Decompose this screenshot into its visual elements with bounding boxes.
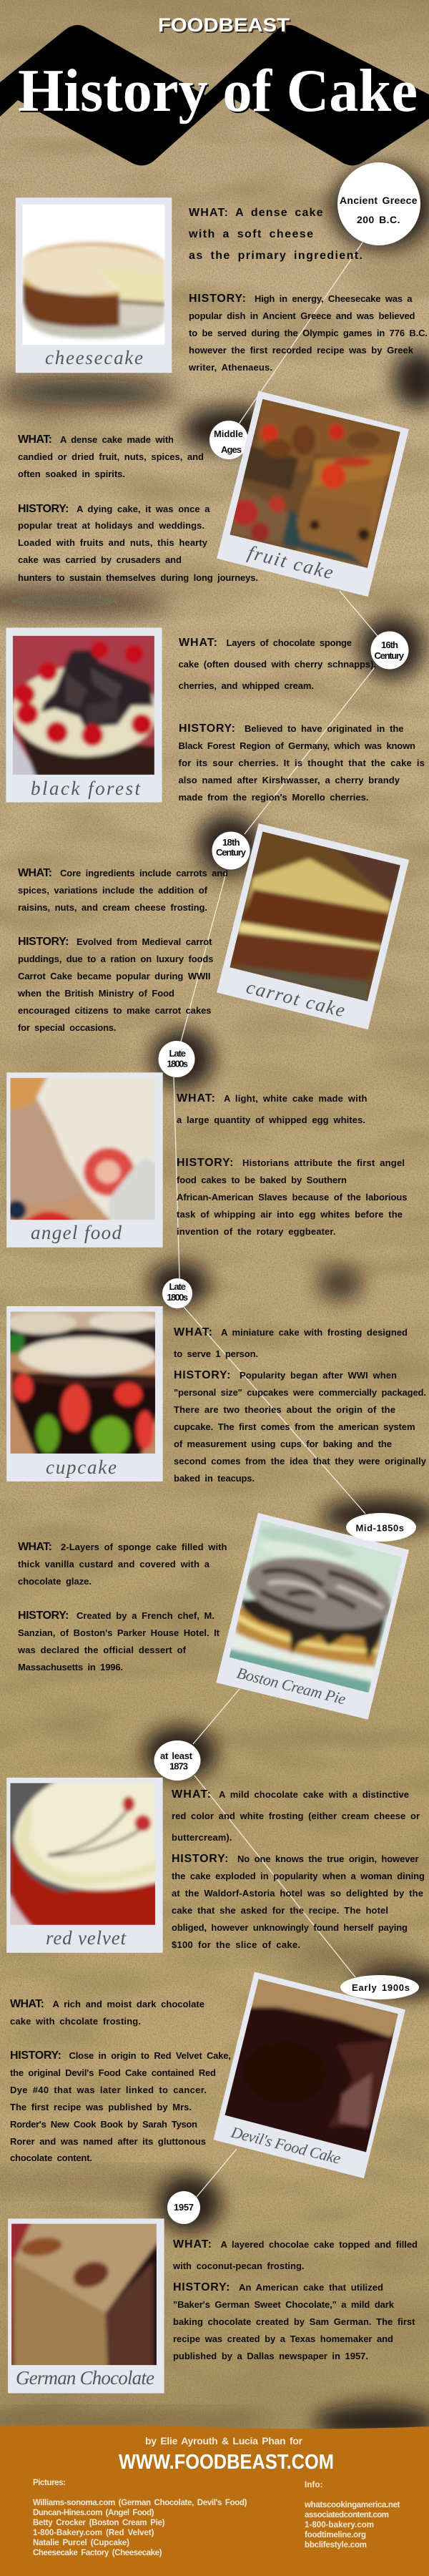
section text: black forest: made from the region's Morello cherries. xyxy=(179,792,369,803)
section text: devil's food cake: HISTORY: xyxy=(10,2049,61,2062)
section text: red velvet: buttercream). xyxy=(172,1832,232,1843)
date marker: 16th century: 16th xyxy=(381,640,398,650)
section text: cheesecake: however the first recorded recipe was by Greek xyxy=(189,345,414,356)
section text: carrot cake: spices, variations include the addition of xyxy=(18,885,208,896)
section text: german chocolate: A layered chocolae cake topped and filled xyxy=(220,2239,418,2250)
caption: red velvet: red velvet xyxy=(46,1927,127,1949)
section text: carrot cake: encouraged citizens to make carrot cakes xyxy=(18,1005,212,1016)
date marker: late 1800s (second): Late xyxy=(169,1281,186,1292)
section text: red velvet: No one knows the true origin, however xyxy=(237,1853,419,1864)
photo: carrot cake xyxy=(213,823,413,1029)
section text: carrot cake: raisins, nuts, and cream cheese frosting. xyxy=(18,902,207,913)
photo: devil's food cake xyxy=(213,1969,410,2178)
date marker: mid-1850s: Mid-1850s xyxy=(356,1523,404,1534)
section text: devil's food cake: the original Devil's Food Cake contained Red xyxy=(10,2067,216,2078)
section text: german chocolate: recipe was created by a Texas homemaker and xyxy=(173,2333,393,2344)
section text: devil's food cake: Close in origin to Red Velvet Cake, xyxy=(69,2050,231,2061)
section text: german chocolate: "Baker's German Sweet Chocolate," a mild dark xyxy=(173,2299,395,2310)
section text: fruit cake: A dying cake, it was once a xyxy=(77,504,210,514)
section text: red velvet: $100 for the slice of cake. xyxy=(172,1939,300,1950)
section text: boston cream pie: chocolate glaze. xyxy=(18,1576,92,1587)
caption: cupcake: cupcake xyxy=(46,1456,117,1478)
section text: fruit cake: WHAT: xyxy=(18,434,52,446)
section text: angel food: task of whipping air into egg whites before the xyxy=(177,1209,403,1220)
section text: red velvet: at the Waldorf-Astoria hotel was so delighted by the xyxy=(172,1888,423,1899)
section text: german chocolate: WHAT: xyxy=(173,2238,212,2251)
photo: cupcake xyxy=(5,1306,163,1482)
section text: fruit cake: HISTORY: xyxy=(18,503,69,515)
photo: cheesecake xyxy=(16,197,172,373)
title: History of Cake xyxy=(18,57,418,124)
section text: carrot cake: Evolved from Medieval carrot xyxy=(77,936,212,947)
footer picture credits: Williams-sonoma.com (German Chocolate, Devil's Food) xyxy=(33,2499,247,2507)
date marker: late 1800s (second) xyxy=(162,1278,192,1308)
photo: fruit cake xyxy=(213,391,413,597)
section text: cupcake xyxy=(174,1326,427,1484)
date marker: late 1800s xyxy=(159,1041,194,1077)
caption: german chocolate: German Chocolate xyxy=(16,2367,154,2389)
section text: black forest: Layers of chocolate sponge xyxy=(226,637,352,648)
section text: red velvet: red color and white frosting (either cream cheese or xyxy=(172,1811,420,1821)
section text: black forest: for its sour cherries. It is thought that the cake is xyxy=(179,758,425,768)
section text: cheesecake: WHAT: A dense cake xyxy=(189,207,323,219)
date marker: ancient greece xyxy=(337,162,420,245)
footer info credits: bbclifestyle.com xyxy=(305,2541,367,2550)
section text: devil's food cake: Dye #40 that was later linked to cancer. xyxy=(10,2085,207,2095)
section text: fruit cake: Loaded with fruits and nuts, this hearty xyxy=(18,537,208,548)
section text: boston cream pie: 2-Layers of sponge cake filled with xyxy=(61,1542,227,1552)
section text: carrot cake: WHAT: xyxy=(18,867,52,879)
footer picture credits: Natalie Purcel (Cupcake) xyxy=(33,2539,129,2547)
caption: carrot cake: carrot cake xyxy=(245,976,347,1021)
section text: fruit cake: candied or dried fruit, nuts, spices, and xyxy=(18,451,204,462)
section text: black forest: also named after Kirshwasser, a cherry brandy xyxy=(179,775,400,785)
title: History of Cake xyxy=(19,59,419,126)
section text: boston cream pie xyxy=(17,1541,227,1673)
section text: boston cream pie: Sanzian, of Boston's Parker House Hotel. It xyxy=(18,1627,220,1638)
footer info credits: 1-800-bakery.com xyxy=(305,2521,374,2530)
section text: boston cream pie: was declared the official dessert of xyxy=(17,1645,187,1655)
caption: cheesecake: cheesecake xyxy=(45,347,143,368)
section text: angel food: a large quantity of whipped egg whites. xyxy=(177,1115,365,1125)
section text: german chocolate: published by a Dallas newspaper in 1957. xyxy=(173,2351,368,2361)
footer picture credits: Cheesecake Factory (Cheesecake) xyxy=(33,2549,162,2557)
section text: fruit cake xyxy=(18,434,258,583)
caption: angel food: angel food xyxy=(31,1222,122,1243)
section text: cheesecake xyxy=(188,207,428,373)
section text: red velvet: obliged, however unknowingly found herself paying xyxy=(172,1922,408,1933)
photo: german chocolate xyxy=(6,2218,164,2394)
footer info credits: foodtimeline.org xyxy=(305,2531,366,2540)
date marker: 16th century: Century xyxy=(375,650,405,661)
footer credit: by Elie Ayrouth & Lucia Phan for xyxy=(145,2435,303,2447)
caption: black forest: black forest xyxy=(31,778,141,799)
caption: fruit cake: fruit cake xyxy=(246,542,335,583)
section text: angel food: African-American Slaves because of the laborious xyxy=(177,1192,408,1203)
date marker: ancient greece: Ancient Greece xyxy=(340,195,418,206)
section text: angel food: food cakes to be baked by Southern xyxy=(177,1175,347,1185)
section text: black forest: cake (often doused with cherry schnapps), xyxy=(179,659,376,670)
logo: Foodbeast: FOODBEAST xyxy=(158,14,290,36)
photo: boston cream pie xyxy=(216,1512,413,1720)
section text: angel food: A light, white cake made with xyxy=(224,1093,368,1104)
timeline connector line xyxy=(174,243,378,2197)
section text: cupcake: There are two theories about the origin of the xyxy=(174,1404,395,1415)
date marker: at least 1873: at least xyxy=(160,1750,193,1761)
section text: cheesecake: to be served during the Olympic games in 776 B.C. xyxy=(189,328,428,338)
photo: angel food xyxy=(5,1072,163,1248)
section text: fruit cake: often soaked in spirits. xyxy=(18,469,125,479)
date marker: early 1900s: Early 1900s xyxy=(352,1982,410,1993)
section text: cupcake: of measurement using cups for baking and the xyxy=(174,1439,392,1449)
date marker: ancient greece: 200 B.C. xyxy=(357,214,400,225)
section text: fruit cake: hunters to sustain themselves during long journeys. xyxy=(18,572,258,583)
footer info credits xyxy=(304,2481,400,2550)
section text: cupcake: baked in teacups. xyxy=(174,1473,255,1484)
section text: boston cream pie: WHAT: xyxy=(18,1541,52,1553)
footer picture credits: Betty Crocker (Boston Cream Pie) xyxy=(33,2519,165,2527)
date marker: middle ages: Ages xyxy=(221,444,242,455)
section text: devil's food cake: Rorder's New Cook Book by Sarah Tyson xyxy=(10,2119,197,2130)
section text: fruit cake: popular treat at holidays and weddings. xyxy=(18,520,204,531)
section text: cheesecake: High in energy, Cheesecake was a xyxy=(255,293,413,304)
section text: angel food: Historians attribute the first angel xyxy=(242,1157,405,1168)
section text: cheesecake: writer, Athenaeus. xyxy=(188,362,272,373)
section text: german chocolate: HISTORY: xyxy=(173,2281,230,2293)
section text: german chocolate xyxy=(172,2238,418,2361)
section text: cupcake: to serve 1 person. xyxy=(174,1348,258,1359)
photo: red velvet xyxy=(5,1778,163,1953)
footer picture credits: Duncan-Hines.com (Angel Food) xyxy=(33,2509,154,2517)
date marker: middle ages: Middle xyxy=(214,428,243,439)
section text: cupcake: HISTORY: xyxy=(174,1369,230,1381)
section text: devil's food cake: cake with chcolate frosting. xyxy=(10,2016,141,2027)
date marker: 1957: 1957 xyxy=(174,2202,194,2213)
section text: german chocolate: baking chocolate created by Sam German. The first xyxy=(173,2316,415,2327)
footer info credits: Info: xyxy=(305,2481,323,2489)
section text: black forest: WHAT: xyxy=(179,637,217,649)
section text: devil's food cake: A rich and moist dark chocolate xyxy=(53,1999,204,2009)
footer picture credits: Pictures: xyxy=(33,2479,66,2487)
section text: black forest: Black Forest Region of Germany, which was known xyxy=(179,740,415,751)
section text: red velvet: the cake exploded in popularity when a woman dining xyxy=(172,1871,425,1881)
section text: cheesecake: as the primary ingredient. xyxy=(189,250,363,262)
date marker: at least 1873 xyxy=(154,1740,200,1781)
footer band xyxy=(0,2425,429,2576)
caption: boston cream pie: Boston Cream Pie xyxy=(235,1664,347,1708)
section text: devil's food cake: The first recipe was published by Mrs. xyxy=(10,2102,192,2112)
section text: angel food: WHAT: xyxy=(177,1092,215,1105)
footer info credits: whatscookingamerica.net xyxy=(304,2501,400,2509)
section text: cupcake: second comes from the idea that they were originally xyxy=(174,1456,427,1466)
section text: cupcake: WHAT: xyxy=(174,1326,212,1338)
section text: devil's food cake: Rorer and was named after its gluttonous xyxy=(10,2136,206,2147)
section text: boston cream pie: Created by a French chef, M. xyxy=(77,1610,214,1621)
date marker: mid-1850s xyxy=(346,1513,416,1542)
footer website: WWW.FOODBEAST.COM xyxy=(119,2451,334,2474)
section text: angel food: HISTORY: xyxy=(177,1157,233,1169)
date marker: late 1800s: 1800s xyxy=(167,1059,188,1069)
date marker: 1957 xyxy=(167,2191,200,2224)
section text: black forest xyxy=(179,637,425,803)
caption: devil's food cake: Devil's Food Cake xyxy=(229,2122,342,2168)
section text: boston cream pie: Massachusetts in 1996. xyxy=(18,1662,123,1673)
footer picture credits: 1-800-Bakery.com (Red Velvet) xyxy=(33,2529,154,2537)
section text: devil's food cake: WHAT: xyxy=(10,1998,44,2010)
section text: cheesecake: popular dish in Ancient Greece and was believed xyxy=(189,310,415,321)
section text: carrot cake: for special occasions. xyxy=(18,1022,116,1033)
section text: boston cream pie: thick vanilla custard and covered with a xyxy=(18,1559,210,1569)
section text: black forest: HISTORY: xyxy=(179,723,235,735)
date marker: early 1900s xyxy=(340,1975,419,1999)
section text: german chocolate: with coconut-pecan frosting. xyxy=(172,2261,305,2271)
section text: carrot cake: puddings, due to a ration on luxury foods xyxy=(18,954,213,964)
section text: cupcake: "personal size" cupcakes were commercially packaged. xyxy=(174,1387,426,1398)
header zigzag banner xyxy=(0,25,429,165)
section text: cheesecake: with a soft cheese xyxy=(188,228,313,240)
date marker: at least 1873: 1873 xyxy=(169,1761,188,1771)
section text: devil's food cake xyxy=(10,1998,231,2163)
section text: angel food xyxy=(177,1092,408,1237)
section text: boston cream pie: HISTORY: xyxy=(18,1610,69,1622)
section text: black forest: cherries, and whipped cream. xyxy=(179,680,314,691)
date marker: 18th century xyxy=(212,831,250,870)
section text: black forest: Believed to have originated in the xyxy=(245,723,403,734)
date marker: middle ages xyxy=(209,421,248,459)
section text: red velvet: HISTORY: xyxy=(172,1853,229,1865)
section text: red velvet: WHAT: xyxy=(172,1788,211,1801)
section text: cupcake: A miniature cake with frosting designed xyxy=(221,1327,408,1338)
date marker: 18th century: Century xyxy=(216,847,247,858)
section text: devil's food cake: chocolate content. xyxy=(10,2153,92,2163)
section text: german chocolate: An American cake that utilized xyxy=(239,2282,383,2293)
section text: red velvet: cake that she asked for the recipe. The hotel xyxy=(172,1905,388,1916)
logo: Foodbeast: FOODBEAST xyxy=(159,16,292,37)
section text: carrot cake xyxy=(17,867,228,1033)
footer picture credits xyxy=(33,2479,247,2557)
section text: fruit cake: cake was carried by crusaders and xyxy=(18,554,182,565)
section text: red velvet: A mild chocolate cake with a distinctive xyxy=(219,1789,409,1800)
section text: angel food: invention of the rotary eggbeater. xyxy=(177,1226,336,1237)
section text: carrot cake: Carrot Cake became popular during WWII xyxy=(18,971,210,981)
section text: red velvet xyxy=(172,1788,425,1950)
section text: cheesecake: HISTORY: xyxy=(189,293,246,305)
section text: cupcake: cupcake. The first comes from the american system xyxy=(174,1421,415,1432)
date marker: late 1800s (second): 1800s xyxy=(167,1292,188,1303)
date marker: 18th century: 18th xyxy=(222,837,240,848)
footer info credits: associatedcontent.com xyxy=(305,2511,389,2519)
photo: black forest xyxy=(6,627,162,803)
section text: carrot cake: HISTORY: xyxy=(18,936,69,948)
section text: carrot cake: Core ingredients include carrots and xyxy=(60,868,228,878)
section text: fruit cake: A dense cake made with xyxy=(60,434,174,445)
section text: cupcake: Popularity began after WWI when xyxy=(240,1370,397,1381)
date marker: 16th century xyxy=(370,631,409,670)
section text: carrot cake: when the British Ministry of Food xyxy=(17,988,174,999)
date marker: late 1800s: Late xyxy=(169,1048,186,1059)
